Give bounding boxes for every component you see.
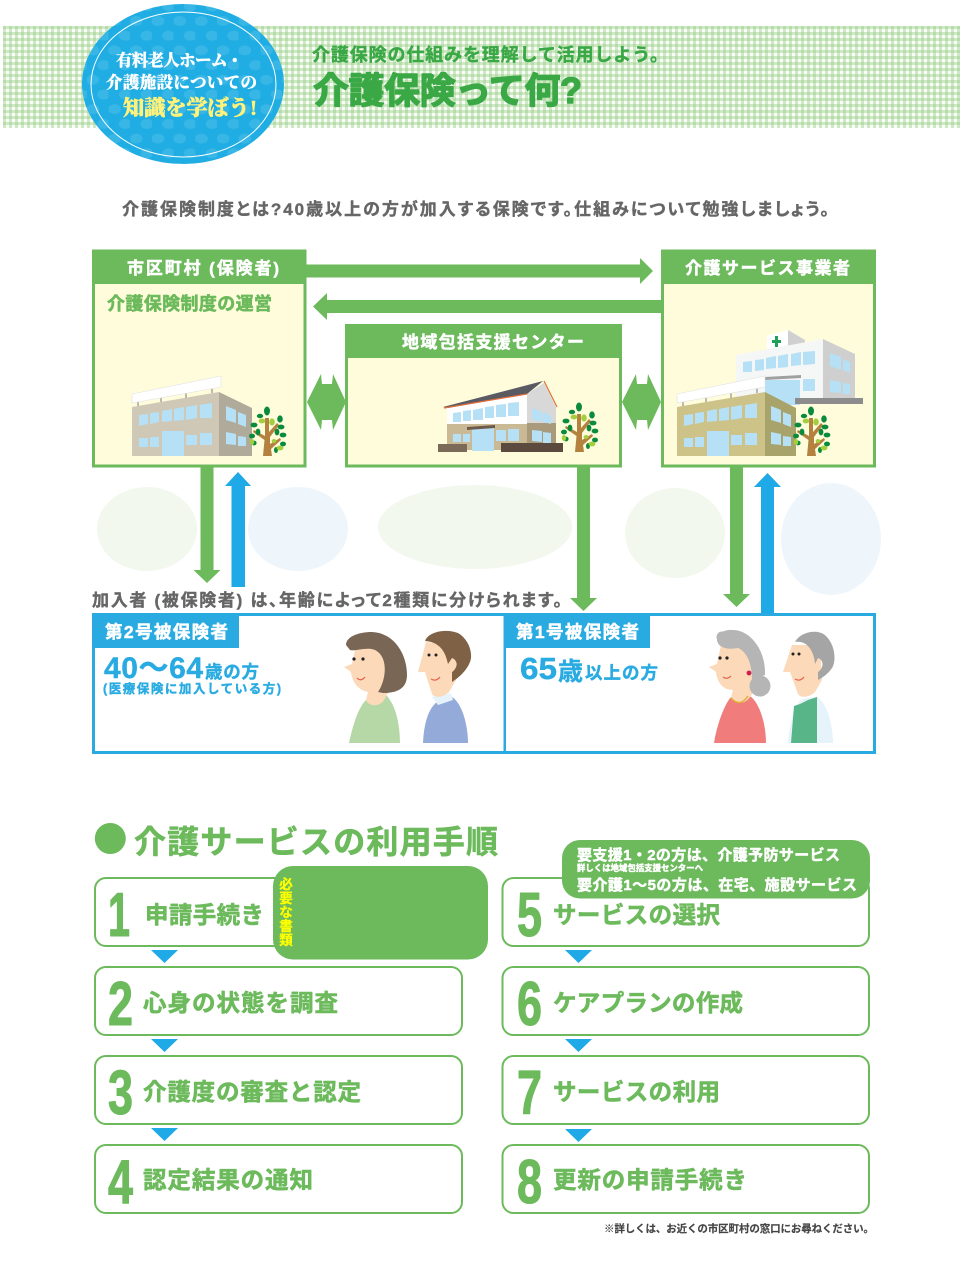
icon: municipal office building bbox=[132, 376, 286, 456]
callout: required documents: 必 bbox=[279, 876, 293, 892]
sub-panel: type 2 insured: 第2号被保険者 bbox=[105, 622, 228, 642]
illustration: middle-aged man bbox=[418, 631, 471, 743]
illustration: elderly woman bbox=[709, 630, 770, 743]
step 6 bbox=[502, 967, 869, 1039]
header gingham band bbox=[3, 26, 960, 128]
step 5: 5 bbox=[517, 881, 542, 950]
step 2: 2 bbox=[108, 970, 133, 1039]
badge: learn about nursing homes bbox=[82, 4, 284, 164]
sub-panel: type 1 insured: 以上の方 bbox=[585, 663, 658, 683]
sub-panel: type 2 insured: 歳の方 bbox=[205, 662, 259, 682]
step 8: 更新の申請手続き bbox=[553, 1167, 747, 1193]
badge: learn about nursing homes: 知識を学ぼう! bbox=[123, 96, 257, 120]
sub-panel: type 1 insured bbox=[505, 615, 658, 686]
arrow: step 2 to 3 bbox=[151, 1039, 178, 1052]
heading: municipality: 市区町村 (保険者) bbox=[127, 258, 279, 278]
subtitle: 介護保険の仕組みを理解して活用しよう。 bbox=[312, 45, 668, 65]
panel: municipality bbox=[92, 250, 306, 466]
step 3: 介護度の審査と認定 bbox=[143, 1079, 361, 1105]
callout: required documents: な bbox=[279, 905, 293, 920]
callout: service types by care level: 要支援1・2の方は、介護予防サービス bbox=[577, 846, 840, 864]
step 4: 認定結果の通知 bbox=[143, 1167, 313, 1193]
icon: care center house bbox=[438, 381, 598, 452]
sub-panel: type 1 insured: 65 bbox=[520, 651, 557, 686]
sub-panel: type 2 insured bbox=[94, 615, 281, 696]
heading: care service provider: 介護サービス事業者 bbox=[685, 258, 850, 278]
callout: service types by care level: 詳しくは地域包括支援センターへ bbox=[577, 863, 704, 873]
footnote: ※詳しくは、お近くの市区町村の窓口にお尋ねください。 bbox=[604, 1222, 874, 1235]
step 3 bbox=[95, 1056, 462, 1128]
arrow: insured up to provider bbox=[754, 473, 781, 614]
callout: required documents bbox=[273, 866, 488, 960]
step 8 bbox=[502, 1145, 869, 1217]
step 4: 4 bbox=[108, 1148, 133, 1217]
sub-panel: type 2 insured: (医療保険に加入している方) bbox=[103, 681, 281, 696]
arrow: step 7 to 8 bbox=[565, 1129, 592, 1142]
icon: hospital and care facility bbox=[677, 330, 863, 456]
step 5 bbox=[502, 878, 869, 950]
step 1 bbox=[95, 878, 462, 950]
callout: required documents: 類 bbox=[279, 933, 293, 948]
faint background blobs bbox=[97, 483, 881, 595]
sub-panel: type 1 insured: 歳 bbox=[558, 658, 583, 686]
panel: insured persons bbox=[94, 614, 874, 752]
intro text: 介護保険制度とは?40歳以上の方が加入する保険です。仕組みについて勉強しましょう。 bbox=[122, 199, 829, 219]
step 3: 3 bbox=[108, 1059, 133, 1128]
sub-panel: type 2 insured: 40〜64 bbox=[104, 652, 203, 685]
arrow: insured up to municipality bbox=[225, 472, 251, 587]
step 6: ケアプランの作成 bbox=[553, 990, 743, 1016]
badge: learn about nursing homes: 有料老人ホーム・ bbox=[116, 50, 243, 70]
sub-panel: type 1 insured: 第1号被保険者 bbox=[516, 622, 639, 642]
step 5: サービスの選択 bbox=[553, 902, 720, 928]
badge: learn about nursing homes: 介護施設についての bbox=[106, 72, 257, 92]
main title: 介護保険って何? bbox=[313, 70, 582, 111]
step 6: 6 bbox=[517, 970, 542, 1039]
callout: required documents: 要 bbox=[279, 891, 293, 906]
text: operation of the insurance system: 介護保険制度の運営 bbox=[107, 294, 272, 314]
double arrow: center and provider bbox=[622, 374, 661, 430]
arrow: step 1 to 2 bbox=[151, 950, 178, 963]
heading: community support center: 地域包括支援センター bbox=[402, 332, 584, 352]
caption: two types of insured persons: 加入者 (被保険者) は、年齢によって2種類に分けられます。 bbox=[92, 590, 562, 610]
step 8: 8 bbox=[517, 1148, 542, 1217]
step 2 bbox=[95, 967, 462, 1039]
step 1: 申請手続き bbox=[145, 902, 264, 928]
step 7: サービスの利用 bbox=[553, 1079, 720, 1105]
step 7 bbox=[502, 1056, 869, 1128]
arrow: step 6 to 7 bbox=[565, 1039, 592, 1052]
step 7: 7 bbox=[517, 1059, 542, 1128]
step 1: 1 bbox=[108, 881, 130, 950]
callout: service types by care level bbox=[562, 840, 870, 898]
arrow: service provider to municipality bbox=[313, 293, 662, 320]
illustration: elderly man bbox=[783, 632, 834, 743]
arrow: municipality to service provider bbox=[306, 258, 653, 284]
callout: required documents: 書 bbox=[279, 918, 293, 934]
double arrow: municipality and center bbox=[307, 374, 346, 430]
step 2: 心身の状態を調査 bbox=[143, 990, 338, 1016]
callout: service types by care level: 要介護1〜5の方は、在宅、施設サービス bbox=[577, 876, 857, 894]
arrow: provider down to insured bbox=[723, 467, 750, 607]
section heading: how to use care services: 介護サービスの利用手順 bbox=[134, 824, 498, 860]
arrow: step 5 to 6 bbox=[565, 950, 592, 963]
arrow: center down to insured bbox=[570, 467, 597, 611]
arrow: municipality down to insured bbox=[194, 467, 220, 583]
panel: community support center bbox=[345, 324, 622, 466]
step 4 bbox=[95, 1145, 462, 1217]
illustration: middle-aged woman bbox=[344, 632, 407, 743]
panel: care service provider bbox=[661, 250, 876, 466]
arrow: step 3 to 4 bbox=[151, 1128, 178, 1141]
